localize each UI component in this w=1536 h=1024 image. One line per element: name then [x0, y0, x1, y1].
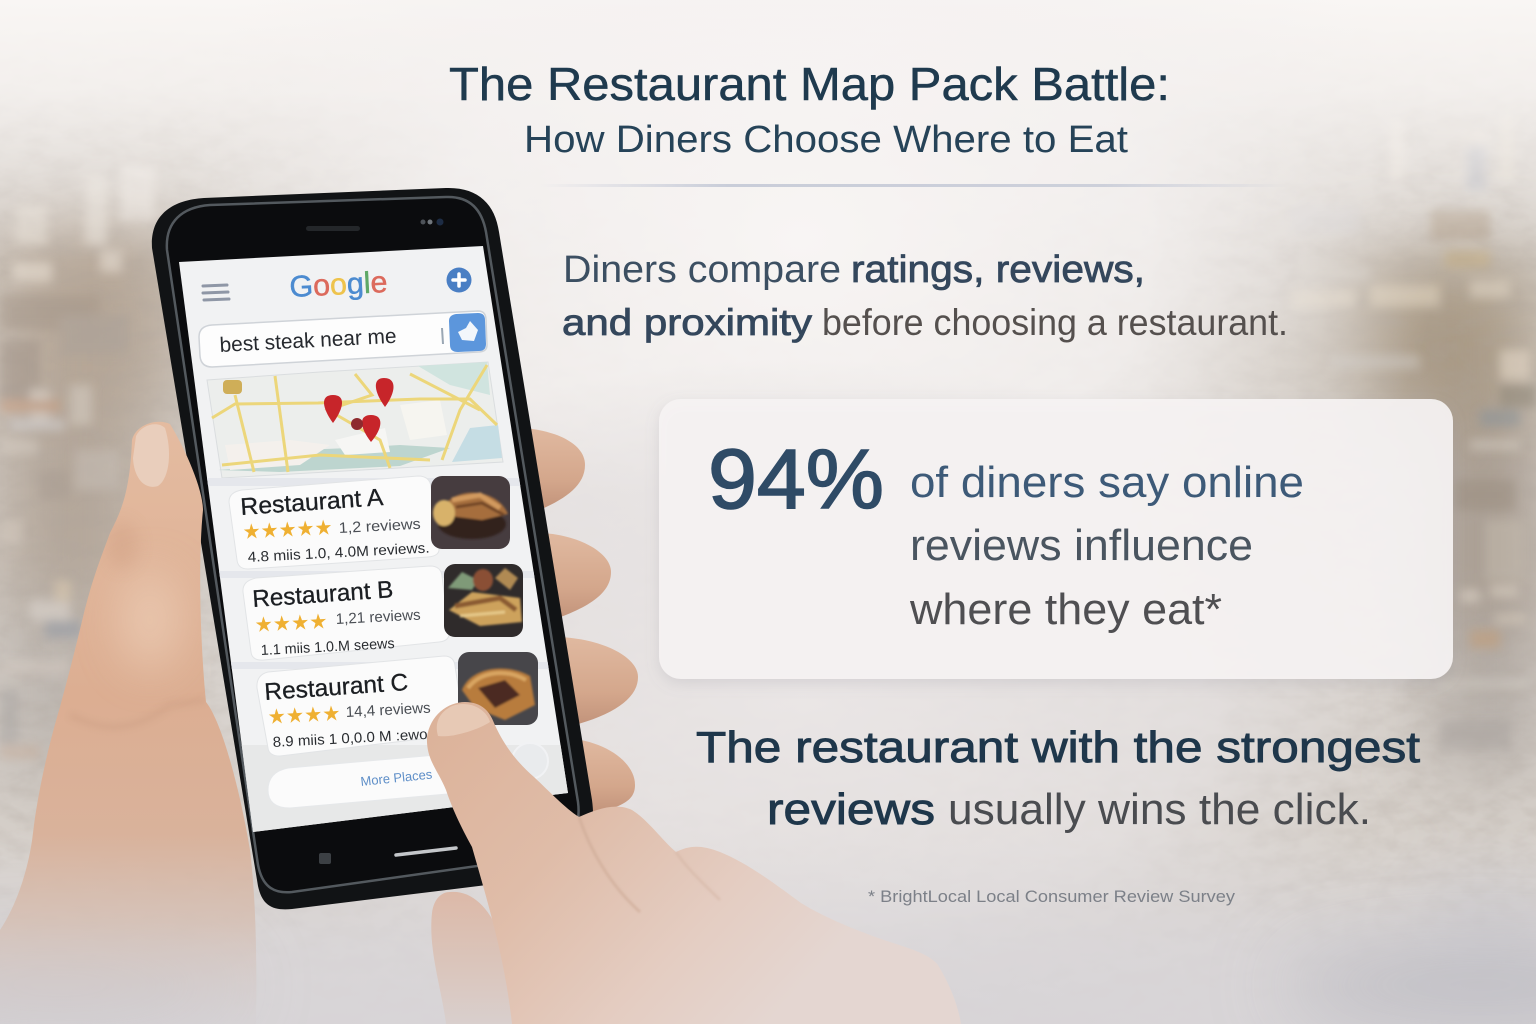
- stat card: 94% of diners: [659, 399, 1453, 679]
- listing: Restaurant C: Restaurant C: [264, 669, 409, 706]
- stat number: 94%: [708, 432, 884, 526]
- index fingernail: [437, 704, 490, 736]
- intro text block: and proximity: [562, 302, 813, 343]
- hamburger menu icon: [203, 285, 229, 300]
- conclusion text block: usually wins the click.: [948, 785, 1371, 834]
- phone speaker and camera: [306, 218, 444, 231]
- finger 3: [545, 637, 638, 730]
- map pin: [324, 395, 342, 423]
- map pin: [376, 378, 394, 407]
- title: The Restaurant Map Pack Battle:: [449, 58, 1170, 110]
- listing: Restaurant C: ★★★★: [267, 702, 341, 729]
- listing: Restaurant B: [243, 564, 523, 660]
- stat description: [909, 458, 1304, 634]
- hand behind phone: fingers: [505, 428, 638, 818]
- search bar: [199, 311, 487, 367]
- stat description: reviews influence: [910, 521, 1253, 570]
- map: [207, 362, 503, 478]
- conclusion text block: The restaurant with the strongest: [696, 723, 1420, 772]
- footnote: source: * BrightLocal Local Consumer Review Survey: [868, 887, 1236, 906]
- plus button: [446, 268, 472, 292]
- food photo: [458, 652, 538, 725]
- intro text block: ratings, reviews,: [851, 249, 1145, 291]
- intro text block: before choosing a restaurant.: [822, 302, 1288, 343]
- listing: Restaurant C: 8.9 miis 1 0,0.0 M :ewo: [272, 727, 428, 751]
- phone home indicator and button: [319, 848, 456, 864]
- subtitle: How Diners Choose Where to Eat: [524, 119, 1128, 161]
- food photo: [431, 476, 510, 549]
- finger 2: [525, 533, 611, 624]
- city lights and buildings: [0, 115, 1536, 760]
- listing: Restaurant A: 4.8 miis 1.0, 4.0M reviews.: [247, 540, 430, 566]
- listing: Restaurant A: Restaurant A: [240, 484, 384, 521]
- food photo: [444, 564, 523, 637]
- conclusion text block: [696, 723, 1420, 834]
- listing: Restaurant A: ★★★★★: [242, 516, 333, 544]
- intro text block: [562, 249, 1288, 343]
- listing: Restaurant A: 1,2 reviews: [338, 516, 421, 537]
- pointing hand with index finger: [427, 702, 961, 1024]
- phone body: [152, 188, 593, 909]
- listing: Restaurant B: 1.1 miis 1.0.M seews: [260, 636, 395, 659]
- round action button: [512, 743, 548, 779]
- search button: [449, 313, 486, 352]
- map pin: [362, 415, 380, 442]
- listing: Restaurant A: [229, 476, 510, 569]
- thumbnail: [133, 424, 169, 487]
- smartphone: [152, 188, 593, 909]
- Google logo: Google: [289, 266, 388, 304]
- more places button: More Places: [360, 766, 433, 789]
- conclusion text block: reviews: [767, 785, 935, 834]
- finger 1: [505, 428, 585, 514]
- left hand holding phone: [0, 422, 256, 1024]
- hand shading: [70, 521, 205, 727]
- listing: Restaurant C: 14,4 reviews: [345, 700, 431, 721]
- thumb: [431, 892, 516, 1024]
- more places button: [268, 752, 470, 808]
- search bar: best steak near me: [219, 325, 397, 357]
- stat description: where they eat*: [909, 585, 1222, 634]
- listing: Restaurant B: ★★★★: [254, 610, 328, 637]
- listing: Restaurant B: 1,21 reviews: [335, 607, 421, 628]
- knuckle creases: [579, 817, 640, 912]
- intro text block: Diners compare: [563, 249, 841, 291]
- finger 4: [560, 738, 635, 818]
- stat description: of diners say online: [910, 458, 1304, 507]
- listing: Restaurant C: [257, 652, 538, 756]
- listing: Restaurant B: Restaurant B: [252, 576, 394, 613]
- phone screen: [170, 240, 590, 840]
